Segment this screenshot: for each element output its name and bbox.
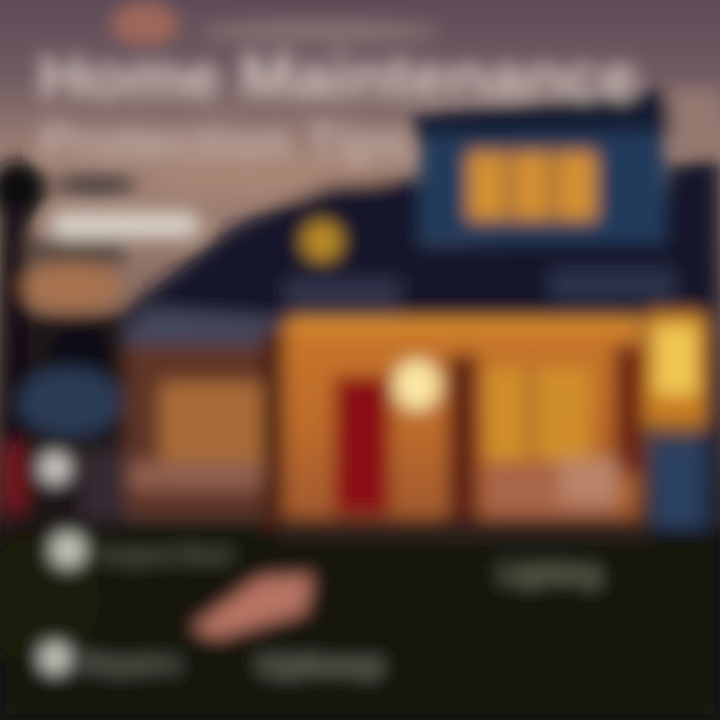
- list item: bottom left: Repairs: [80, 648, 180, 678]
- title: [38, 43, 638, 167]
- dormer windows: [468, 150, 596, 222]
- title: Protection Tips: [40, 115, 410, 167]
- sky colour patches: [111, 2, 720, 196]
- right wall: [652, 440, 710, 565]
- right lantern: [644, 312, 706, 427]
- bullet: left middle: [40, 453, 70, 483]
- list item: garden upper left: [51, 533, 231, 569]
- walkway: [192, 575, 312, 638]
- title: Home Maintenance: [38, 43, 638, 112]
- callout: upper left label: [50, 212, 200, 238]
- main roof: [105, 158, 720, 350]
- porch window: [486, 368, 590, 460]
- porch column: [448, 355, 478, 525]
- list item: garden right: Lighting: [500, 558, 600, 588]
- dormer: [412, 90, 672, 243]
- list item: bottom left: [40, 643, 180, 678]
- list item: garden upper left: Inspect Roof: [100, 542, 231, 569]
- porch lamp glow: [394, 360, 440, 410]
- left tree: [0, 160, 137, 530]
- roof lamp glow: [302, 221, 342, 261]
- red door: [334, 376, 390, 514]
- foreground garden: [0, 518, 720, 720]
- porch: [284, 318, 644, 527]
- house: [105, 90, 720, 580]
- right column: [614, 345, 644, 475]
- list item: bottom centre: Upkeep: [258, 649, 383, 680]
- callout: upper left label: Seasonal Care: [60, 215, 184, 235]
- left wing with window: [120, 330, 286, 530]
